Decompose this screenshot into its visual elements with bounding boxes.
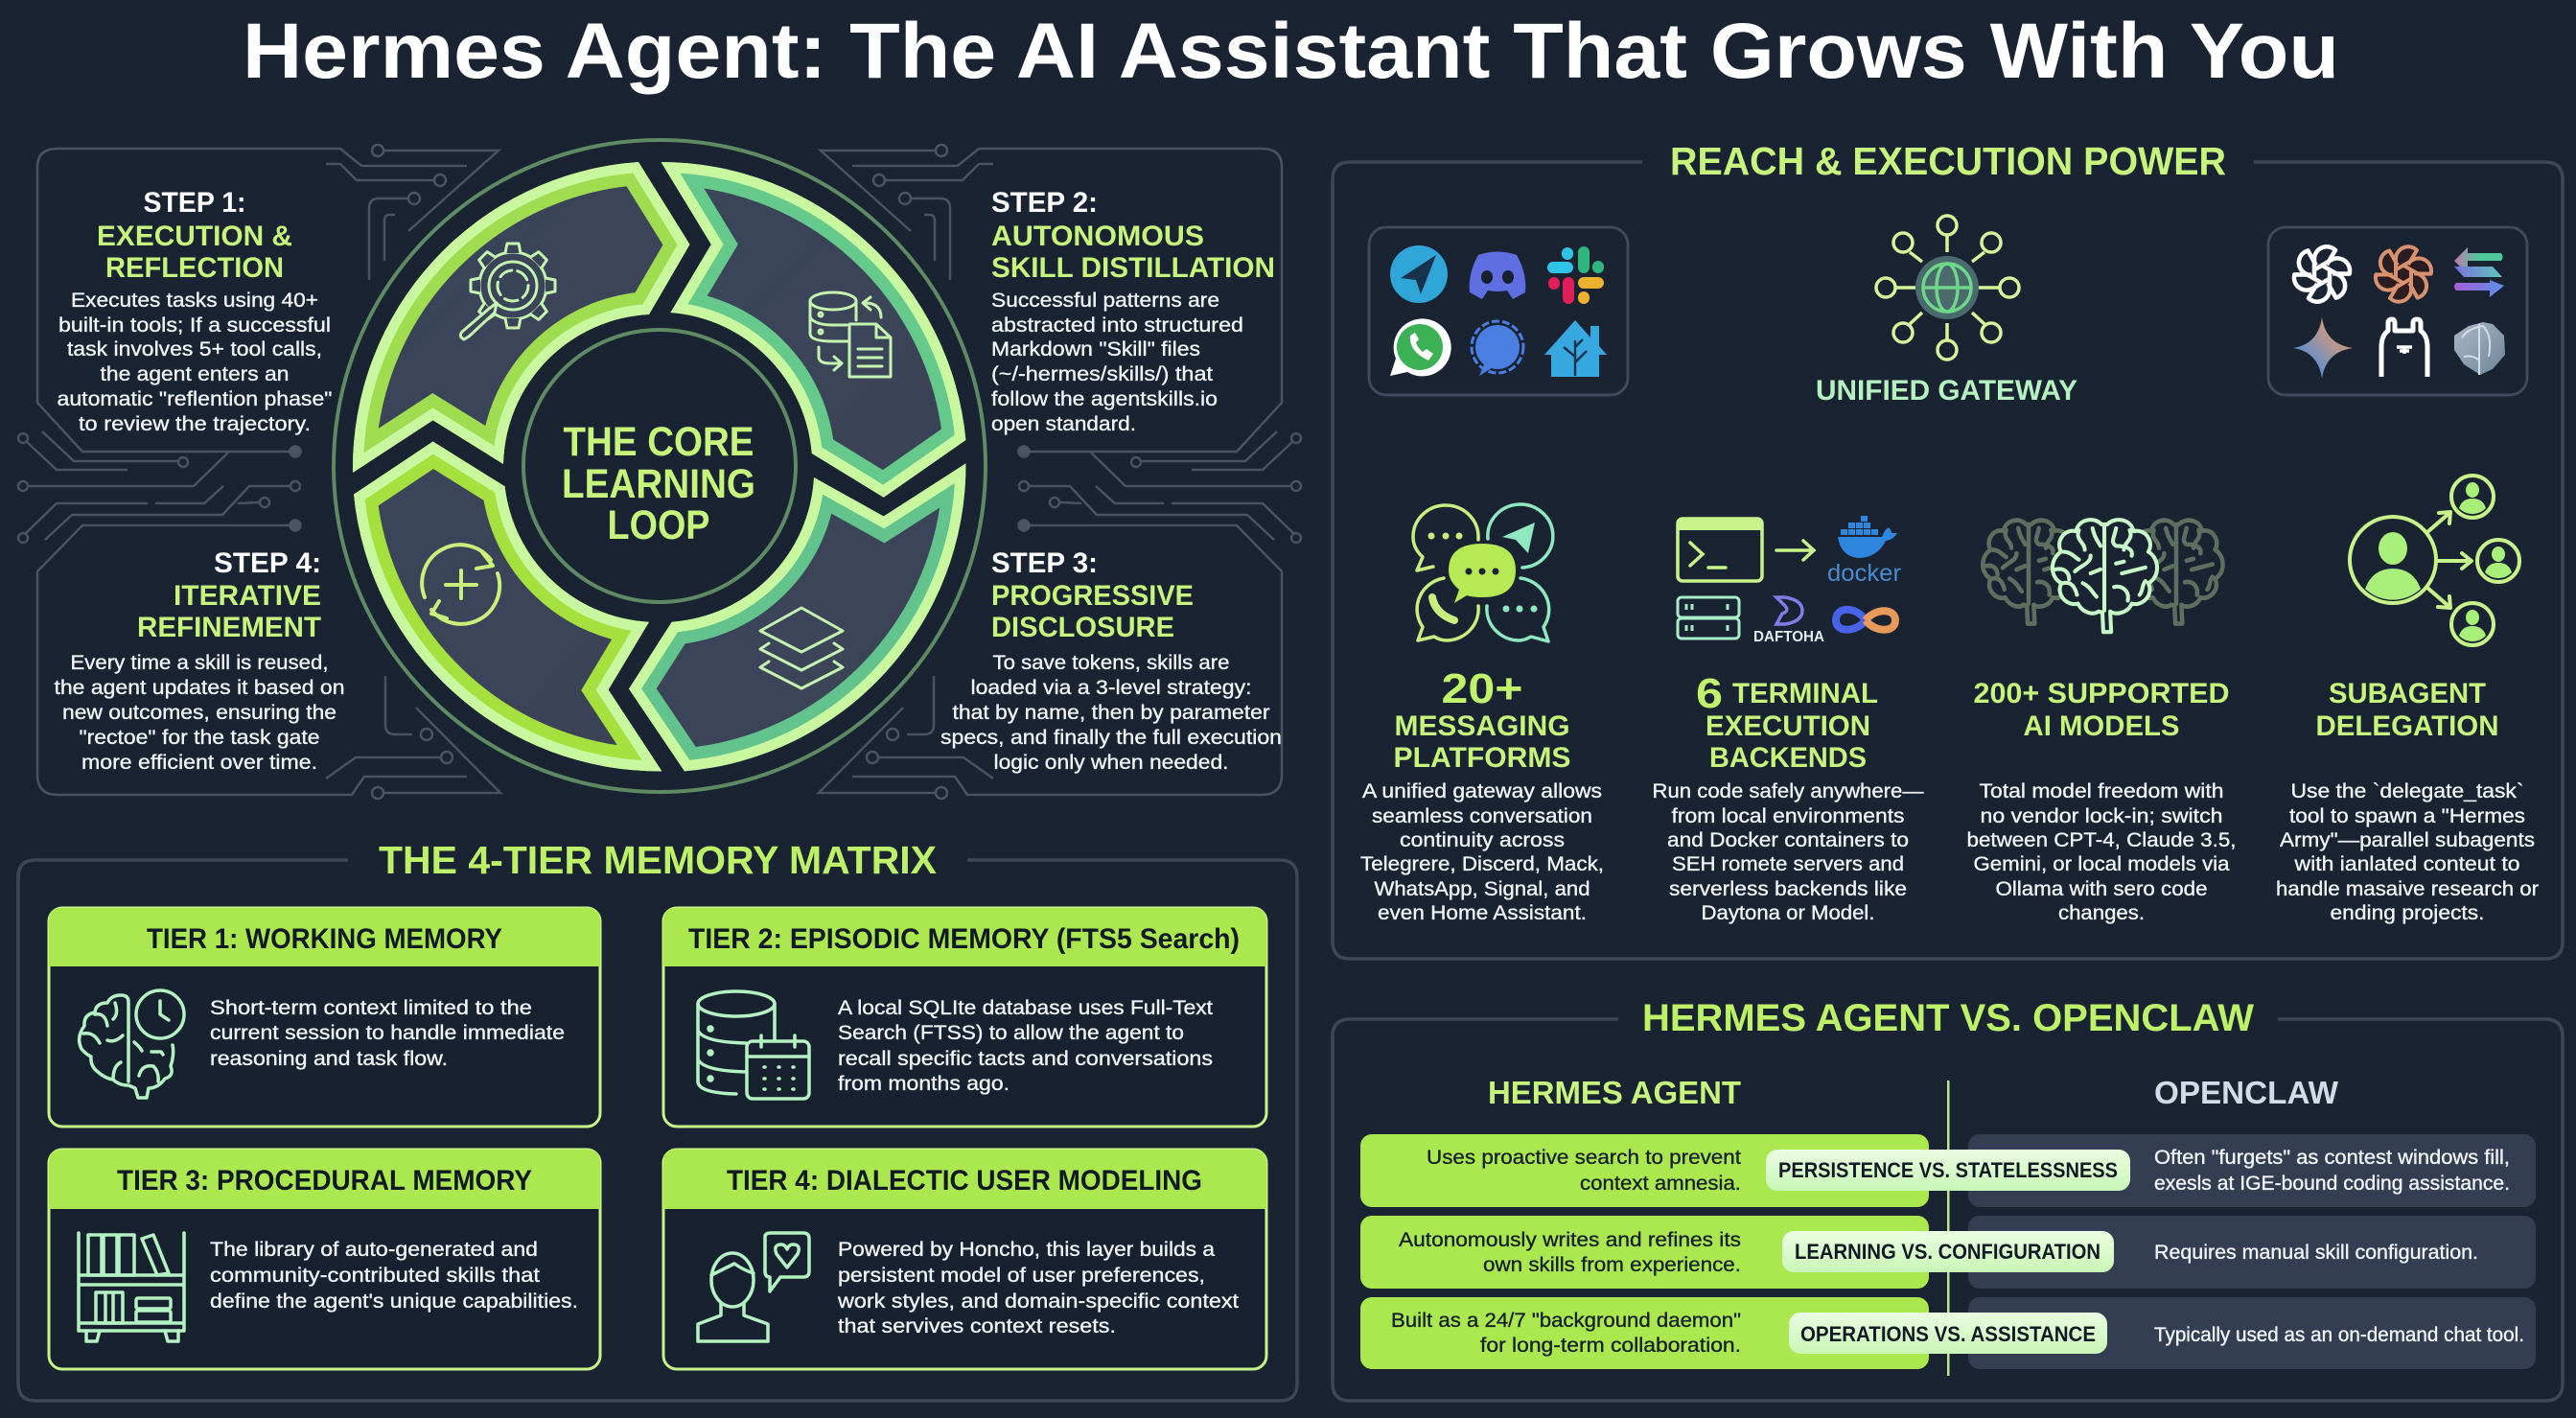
card: tier 1: TIER 1: WORKING MEMORY xyxy=(147,923,502,955)
card: tier 4: that servives context resets. xyxy=(838,1315,1116,1337)
card: tier 1: current session to handle immediate xyxy=(210,1022,565,1044)
text block: step 3: specs, and finally the full execution xyxy=(940,727,1282,749)
icon: home assistant xyxy=(1544,320,1607,377)
text block: step 1: built-in tools; If a successful xyxy=(58,314,331,337)
heading: THE 4-TIER MEMORY MATRIX xyxy=(379,838,937,882)
column: terminal backends xyxy=(1653,516,1923,924)
column: messaging platforms xyxy=(1360,504,1604,924)
description: serverless backends like xyxy=(1669,878,1907,900)
text block: step 2: STEP 2: xyxy=(991,187,1098,219)
stat heading: 20+ xyxy=(1442,665,1522,712)
icon: discord xyxy=(1470,251,1525,299)
row: learning vs configuration: Autonomously writes and refines its xyxy=(1399,1229,1741,1251)
text block: step 4: "rectoe" for the task gate xyxy=(79,727,320,749)
row: operations vs assistance: OPERATIONS VS. ASSISTANCE xyxy=(1800,1322,2096,1346)
row: persistence vs statelessness: Often "furgets" as contest windows fill, xyxy=(2154,1147,2510,1169)
text block: step 2: (~/-hermes/skills/) that xyxy=(991,363,1213,385)
text block: step 2: SKILL DISTILLATION xyxy=(991,252,1275,284)
card: tier 2: TIER 2: EPISODIC MEMORY (FTS5 Search) xyxy=(688,923,1240,955)
row: persistence vs statelessness: context amnesia. xyxy=(1580,1173,1741,1195)
row: learning vs configuration: LEARNING VS. CONFIGURATION xyxy=(1795,1240,2100,1264)
text block: step 3: DISCLOSURE xyxy=(991,612,1174,643)
icon: gemini star xyxy=(2293,317,2353,379)
description: Telegrere, Discerd, Mack, xyxy=(1360,853,1604,875)
icon: whatsapp xyxy=(1390,318,1451,376)
text block: step 2: Markdown "Skill" files xyxy=(991,338,1200,360)
text block: step 3: PROGRESSIVE xyxy=(991,580,1194,612)
text block: step 4: more efficient over time. xyxy=(81,752,317,774)
description: Daytona or Model. xyxy=(1701,902,1875,924)
row: persistence vs statelessness: Uses proactive search to prevent xyxy=(1427,1147,1741,1169)
text block: step 2: AUTONOMOUS xyxy=(991,221,1204,252)
description: handle masaive research or xyxy=(2276,878,2539,900)
icon: refresh with plus xyxy=(422,545,499,624)
box: messaging platform logos xyxy=(1369,227,1628,395)
column: supported ai models: AI MODELS xyxy=(2023,710,2180,742)
description: no vendor lock-in; switch xyxy=(1981,805,2222,827)
icon: database and document xyxy=(810,292,891,377)
text block: step 4 xyxy=(54,547,345,774)
text block: step 2: open standard. xyxy=(991,413,1136,435)
text block: step 4: STEP 4: xyxy=(214,547,321,579)
text block: step 1: task involves 5+ tool calls, xyxy=(67,338,322,360)
description: and Docker containers to xyxy=(1667,829,1909,851)
core learning loop diagram xyxy=(334,140,986,792)
card: tier 3 xyxy=(49,1150,600,1369)
icon: brains xyxy=(1983,520,2223,632)
column: messaging platforms: PLATFORMS xyxy=(1394,742,1570,774)
column: subagent delegation: DELEGATION xyxy=(2316,710,2498,742)
icon: terminal, docker, server, daytona, modal xyxy=(1678,516,1901,645)
description: A unified gateway allows xyxy=(1362,780,1602,802)
icon: bookshelf xyxy=(79,1233,184,1341)
description: SEH romete servers and xyxy=(1672,853,1904,875)
text block: step 2: Successful patterns are xyxy=(991,290,1219,312)
row: operations vs assistance: Typically used as an on-demand chat tool. xyxy=(2154,1324,2524,1346)
row: persistence vs statelessness: exesls at IGE-bound coding assistance. xyxy=(2154,1173,2510,1195)
text block: step 3 xyxy=(940,547,1282,774)
description: from local environments xyxy=(1672,805,1904,827)
panel: 4-tier memory matrix xyxy=(18,838,1297,1401)
loop segment 2 xyxy=(661,162,965,498)
icon: terminal, docker, server, daytona, modal: docker xyxy=(1827,560,1901,587)
description: even Home Assistant. xyxy=(1378,902,1587,924)
text block: step 1: Executes tasks using 40+ xyxy=(71,290,318,312)
text block: step 1 xyxy=(58,187,332,435)
card: tier 2: Search (FTSS) to allow the agent to xyxy=(838,1022,1184,1044)
description: Army"—parallel subagents xyxy=(2280,829,2535,851)
icon: slack xyxy=(1547,246,1604,304)
description xyxy=(2276,780,2539,924)
icon: signal xyxy=(1472,321,1523,376)
center label: THE CORE xyxy=(564,419,754,465)
inner ring xyxy=(523,330,796,602)
icon: person with heart bubble xyxy=(698,1233,809,1341)
icon: agent delegating to subagents xyxy=(2350,476,2519,645)
description xyxy=(1360,780,1604,924)
icon: gear with magnifier xyxy=(460,244,555,339)
column header: openclaw: OPENCLAW xyxy=(2154,1075,2339,1110)
text block: step 3: that by name, then by parameter xyxy=(953,702,1269,724)
description: seamless conversation xyxy=(1372,805,1592,827)
card: tier 3: TIER 3: PROCEDURAL MEMORY xyxy=(117,1165,532,1197)
description: with ianlated conteut to xyxy=(2293,853,2519,875)
text block: step 3: STEP 3: xyxy=(991,547,1098,579)
card: tier 2 xyxy=(663,908,1266,1127)
card: tier 1: Short-term context limited to the xyxy=(210,997,532,1019)
card: tier 3: The library of auto-generated and xyxy=(210,1239,538,1261)
text block: step 1: EXECUTION & xyxy=(97,221,292,252)
text block: step 4: new outcomes, ensuring the xyxy=(62,702,337,724)
card: tier 2: A local SQLIte database uses Full-Text xyxy=(838,997,1213,1019)
text block: step 4: Every time a skill is reused, xyxy=(71,652,328,674)
heading: REACH & EXECUTION POWER xyxy=(1670,139,2226,183)
title: Hermes Agent: The AI Assistant That Grows With You xyxy=(243,8,2339,95)
icon: ollama llama xyxy=(2381,319,2427,377)
description: Total model freedom with xyxy=(1979,780,2224,802)
loop segment 3 xyxy=(629,463,965,771)
icon: chat bubbles xyxy=(1413,504,1553,641)
text block: step 1: REFLECTION xyxy=(105,252,284,284)
description: continuity across xyxy=(1400,829,1565,851)
text block: step 3: To save tokens, skills are xyxy=(993,652,1229,674)
icon: unified gateway xyxy=(1876,216,2019,360)
icon: telegram xyxy=(1390,245,1448,303)
card: tier 2: recall specific tacts and conversations xyxy=(838,1048,1213,1070)
column header: hermes agent: HERMES AGENT xyxy=(1488,1075,1741,1110)
center label: LOOP xyxy=(608,502,709,548)
row: learning vs configuration: Requires manual skill configuration. xyxy=(2154,1242,2478,1264)
center label: LEARNING xyxy=(562,461,755,507)
text block: step 1: STEP 1: xyxy=(144,187,245,219)
outer ring xyxy=(334,140,986,792)
card: tier 1: reasoning and task flow. xyxy=(210,1048,448,1070)
description: tool to spawn a "Hermes xyxy=(2289,805,2525,827)
card: tier 4: persistent model of user preferences, xyxy=(838,1265,1205,1287)
center label xyxy=(562,419,755,548)
description: ending projects. xyxy=(2330,902,2485,924)
text block: step 2 xyxy=(991,187,1275,435)
row: learning vs configuration xyxy=(1360,1216,2536,1289)
icon: claude knot xyxy=(2373,246,2434,302)
column: subagent delegation xyxy=(2276,476,2539,924)
center divider xyxy=(1947,1081,1950,1376)
label: unified gateway: UNIFIED GATEWAY xyxy=(1816,375,2077,407)
row: operations vs assistance xyxy=(1360,1297,2536,1369)
text block: step 4: ITERATIVE xyxy=(174,580,321,612)
column: terminal backends: BACKENDS xyxy=(1709,742,1867,774)
icon: crystal gem xyxy=(2454,322,2505,375)
description: Run code safely anywhere— xyxy=(1653,780,1923,802)
card: tier 3: define the agent's unique capabilities. xyxy=(210,1290,578,1313)
icon: brain and clock xyxy=(80,990,184,1098)
icon: database and calendar xyxy=(698,991,809,1099)
description: WhatsApp, Signal, and xyxy=(1375,878,1590,900)
box: ai model logos xyxy=(2268,227,2527,395)
icon: chatgpt xyxy=(2291,246,2353,302)
card: tier 4: Powered by Honcho, this layer builds a xyxy=(838,1239,1215,1261)
text block: step 4: the agent updates it based on xyxy=(54,677,345,699)
text block: step 2: follow the agentskills.io xyxy=(991,388,1218,410)
stat heading: 6 xyxy=(1696,670,1723,717)
icon: router arrows xyxy=(2454,247,2504,297)
card: tier 4: TIER 4: DIALECTIC USER MODELING xyxy=(727,1165,1202,1197)
description: Gemini, or local models via xyxy=(1973,853,2230,875)
card: tier 3: community-contributed skills that xyxy=(210,1265,540,1287)
row: persistence vs statelessness: PERSISTENCE VS. STATELESSNESS xyxy=(1778,1158,2118,1182)
column: supported ai models xyxy=(1967,520,2236,924)
icon: terminal, docker, server, daytona, modal: DAFTOHA xyxy=(1753,629,1824,645)
row: operations vs assistance: Built as a 24/7 "background daemon" xyxy=(1391,1310,1741,1332)
column: messaging platforms: MESSAGING xyxy=(1394,710,1570,742)
description: changes. xyxy=(2058,902,2145,924)
panel: hermes agent vs openclaw xyxy=(1333,997,2563,1401)
text block: step 4: REFINEMENT xyxy=(137,612,321,643)
panel: reach and execution power xyxy=(1333,139,2563,1401)
icon: stacked layers xyxy=(760,608,843,688)
stat heading: 200+ SUPPORTED xyxy=(1973,678,2230,709)
stat heading: SUBAGENT xyxy=(2329,678,2486,709)
row: persistence vs statelessness xyxy=(1360,1134,2536,1207)
circuit board decoration xyxy=(18,145,1301,799)
loop segment 1 xyxy=(353,162,690,473)
card: tier 4: work styles, and domain-specific context xyxy=(837,1290,1239,1313)
row: operations vs assistance: for long-term collaboration. xyxy=(1480,1335,1741,1357)
row: learning vs configuration: own skills from experience. xyxy=(1483,1254,1741,1276)
text block: step 3: loaded via a 3-level strategy: xyxy=(970,677,1252,699)
description xyxy=(1967,780,2236,924)
card: tier 2: from months ago. xyxy=(838,1073,1010,1095)
text block: step 1: to review the trajectory. xyxy=(79,413,311,435)
heading: HERMES AGENT VS. OPENCLAW xyxy=(1642,997,2254,1039)
card: tier 1 xyxy=(49,908,600,1127)
description: Ollama with sero code xyxy=(1996,878,2207,900)
text block: step 3: logic only when needed. xyxy=(993,752,1229,774)
column: terminal backends: TERMINAL xyxy=(1732,678,1878,709)
text block: step 2: abstracted into structured xyxy=(991,314,1243,337)
description: Use the `delegate_task` xyxy=(2291,780,2523,802)
text block: step 1: automatic "reflention phase" xyxy=(58,388,332,410)
column: terminal backends: EXECUTION xyxy=(1706,710,1870,742)
description xyxy=(1653,780,1923,924)
text block: step 1: the agent enters an xyxy=(100,363,290,385)
card: tier 4 xyxy=(663,1150,1266,1369)
loop segment 4 xyxy=(354,441,661,771)
description: between CPT-4, Claude 3.5, xyxy=(1967,829,2236,851)
